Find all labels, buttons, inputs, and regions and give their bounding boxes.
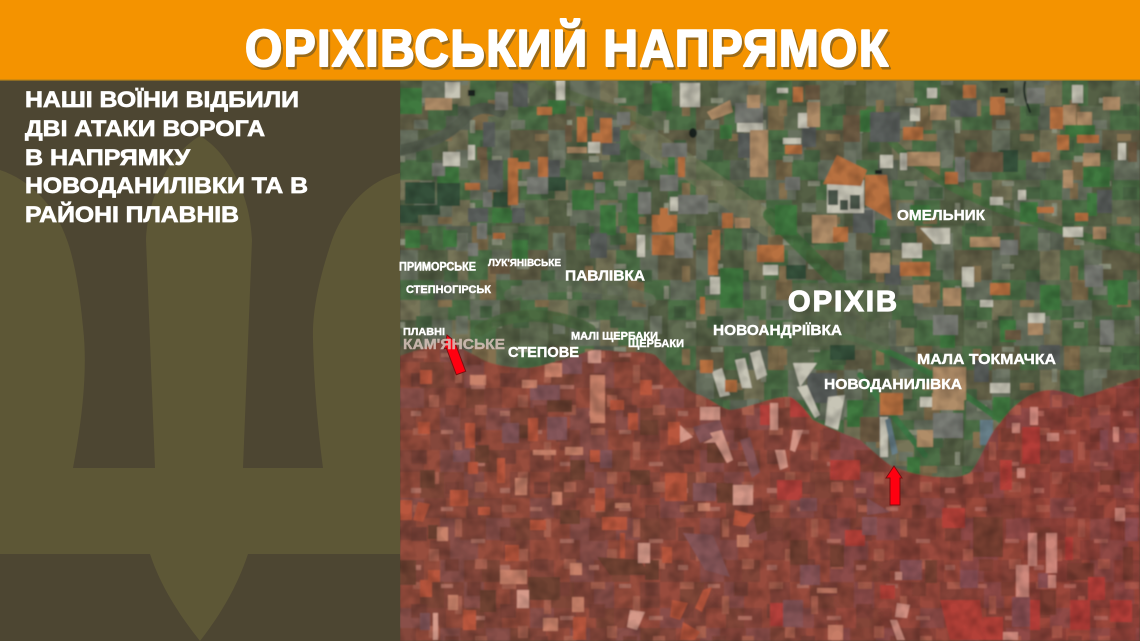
label: Плавні: ПЛАВНІ <box>403 326 445 338</box>
map: occupied territory red overlay <box>400 330 1140 641</box>
title shadow and text: ОРІХІВСЬКИЙ НАПРЯМОК <box>245 18 889 77</box>
text block: report of repelled attacks: ДВІ АТАКИ ВОРОГА <box>25 116 265 141</box>
red zone: pale salmon fields <box>437 363 843 640</box>
text block: report of repelled attacks: НАШІ ВОЇНИ ВІДБИЛИ <box>25 87 299 112</box>
text block: report of repelled attacks: РАЙОНІ ПЛАВНІВ <box>25 202 239 227</box>
map: brown fields <box>477 85 1137 442</box>
label: Щербаки: ЩЕРБАКИ <box>628 338 684 350</box>
text block: report of repelled attacks: В НАПРЯМКУ <box>25 145 190 170</box>
label: Павлівка: ПАВЛІВКА <box>565 268 645 284</box>
arrow: attack near Plavni <box>444 335 466 375</box>
map: pale fields <box>443 80 1126 457</box>
panel: left olive background with trident <box>0 80 400 641</box>
map: orange fields <box>465 85 1099 415</box>
label: Степногірськ: СТЕПНОГІРСЬК <box>406 284 491 296</box>
map: tan fields <box>425 95 1120 447</box>
label: Мала Токмачка: МАЛА ТОКМАЧКА <box>917 351 1056 368</box>
satellite map <box>400 80 1140 641</box>
map: ponds <box>468 88 1008 174</box>
map: valleys, river and town textures <box>400 80 1140 455</box>
red zone: vivid red fields <box>760 397 1132 640</box>
map: green fields <box>400 83 1128 474</box>
map: mottled terrain noise <box>400 81 1140 641</box>
label: Омельник: ОМЕЛЬНИК <box>897 207 986 224</box>
red zone: pale pink fields <box>433 350 1125 640</box>
red zone: dark fields <box>400 400 1133 615</box>
map labels <box>399 207 1056 393</box>
text block: report of repelled attacks: НОВОДАНИЛІВКИ ТА В <box>25 173 308 198</box>
map: dark squares in pale field <box>828 190 860 210</box>
label: Новоданилівка: НОВОДАНИЛІВКА <box>824 376 962 393</box>
header band <box>0 0 1140 81</box>
map: blue-grey field <box>885 418 993 455</box>
label: Приморське: ПРИМОРСЬКЕ <box>399 262 476 274</box>
arrow: attack near Novodanylivka <box>886 466 902 505</box>
label: Степове: СТЕПОВЕ <box>508 345 579 361</box>
label: Малі Щербаки: МАЛІ ЩЕРБАКИ <box>571 330 658 342</box>
text block: report of repelled attacks <box>25 87 308 227</box>
map: dark grey fields <box>468 83 1112 403</box>
map: grey fields <box>432 88 1114 438</box>
label: Кам'янське: КАМ'ЯНСЬКЕ <box>403 336 505 353</box>
red zone: mid orange fields <box>400 370 687 640</box>
label: Новоандріївка: НОВОАНДРІЇВКА <box>713 322 843 339</box>
red zone: mauve fields <box>420 357 1138 630</box>
map: dark green and dark fields <box>400 150 1018 360</box>
icon: trident emblem <box>0 136 400 641</box>
label: Оріхів: ОРІХІВ <box>788 286 897 318</box>
label: Лук'янівське: ЛУК'ЯНІВСЬКЕ <box>488 258 561 269</box>
title shadow and text: ОРІХІВСЬКИЙ НАПРЯМОК <box>247 21 891 80</box>
